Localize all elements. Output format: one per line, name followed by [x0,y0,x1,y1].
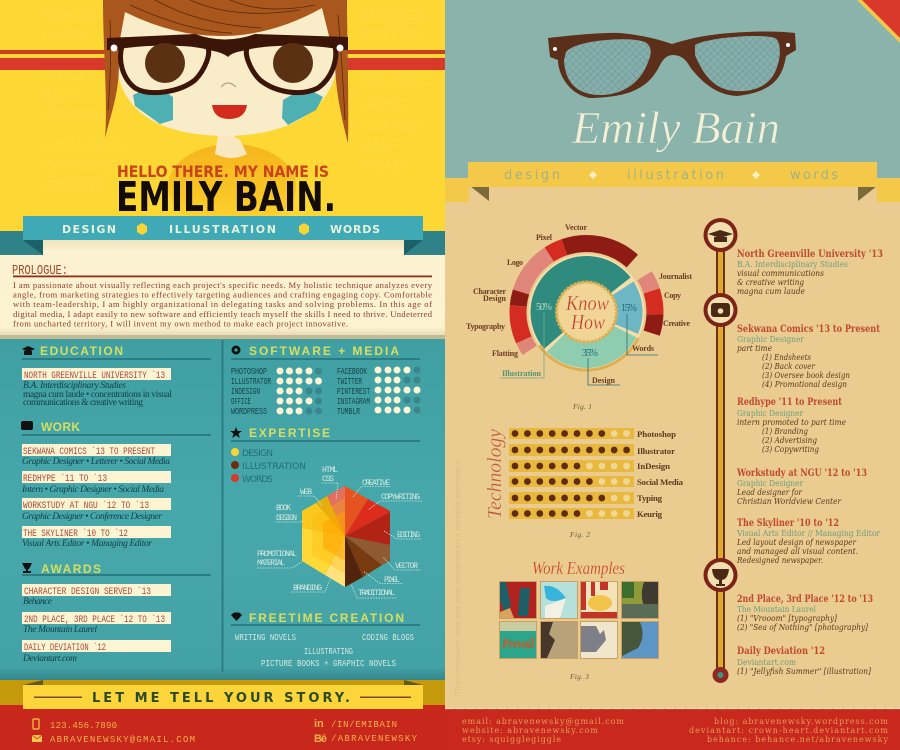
panel: left page header: STRONG [43,177,107,194]
prologue paragraph [13,280,433,328]
contact: behance: Bē [314,733,327,745]
section: software and media: ILLUSTRATOR [231,377,271,387]
entry: north greenville [737,249,883,297]
icon: end marker [712,667,728,683]
hexagon labels: VECTOR [395,562,418,571]
hexagon labels: MATERIAL [257,559,285,568]
section: software and media: PINTEREST [337,387,370,397]
entry: redhype: Redhype '11 to Present [737,397,842,408]
ribbon: right skills banner [445,162,900,202]
section: freetime creation: PICTURE BOOKS + GRAPHIC NOVELS [261,658,396,669]
character portrait [103,0,348,228]
footer contacts right: deviantart: crown-heart.deviantart.com [689,726,888,735]
section: software and media [231,344,420,417]
segment labels: Journalist [659,272,692,281]
hexagon labels: TRADITIONAL [358,589,395,598]
outer ring segments [491,217,682,407]
section: work: THE SKYLINER `10 TO `12 [23,527,128,540]
timeline spine [716,237,725,675]
hexagon labels: DESIGN [276,514,297,523]
entry: workstudy [736,468,867,507]
panel: left page header: LATTE [360,97,406,114]
panel: left page header: MOUNTAIN [360,49,439,66]
panel: left page header [0,0,446,240]
hexagon labels: PROMOTIONAL [257,550,297,559]
vertical fine print: This curriculum vitae has been designed on a reusable workspace [454,460,462,696]
entry: redhype: intern promoted to part time [737,418,846,428]
entry: sekwana comics: part time [737,344,772,354]
name headline: EMILY BAIN. [116,173,336,221]
percentage callouts: Illustration [502,369,542,378]
section: education: EDUCATION [40,344,123,358]
entry: mountain laurel: (1) "Vrooom" [typography] [737,613,838,624]
legend: WORDS [242,475,273,485]
center label [565,291,609,334]
entry: redhype: (1) Branding [762,426,808,437]
panel: left page header: ROAST [360,157,412,174]
segment labels: Vector [565,223,587,232]
segment labels [466,223,692,358]
dots [512,430,630,517]
entry: the skyliner [736,518,881,566]
section: software and media: WORDPRESS [231,407,267,417]
percentage callouts: 50% [536,302,552,313]
bar labels: Typing [637,493,663,503]
panel: right footer [445,708,900,750]
footer contacts left: website: abravenewsky.com [462,726,598,735]
section: freetime creation [231,611,420,669]
thumbnails [499,581,659,659]
contact: behance [314,733,418,745]
segment labels: Typography [466,322,505,331]
panel: left page header: BLACK [43,47,92,64]
segment labels: Design [483,294,507,303]
entry: daily deviation: Daily Deviation '12 [737,646,825,657]
footer contacts left [462,717,624,744]
segment labels: Pixel [536,233,553,242]
entry: sekwana comics: (3) Oversee book design [762,370,850,381]
ribbon: right skills banner: words [790,168,838,183]
entry: workstudy: Christian Worldview Center [737,497,842,507]
entry: daily deviation: Deviantart.com [737,658,796,668]
section: education: NORTH GREENVILLE UNIVERSITY `13 [24,369,165,382]
hexagon labels [257,466,422,598]
segment labels: Character [473,287,506,296]
rating dots [276,366,420,414]
section: software and media: PHOTOSHOP [231,367,267,377]
percentage callouts: Words [632,344,654,353]
center label: How [570,310,605,334]
panel: right page background [445,0,900,750]
panel: prologue [0,240,446,339]
segment labels: Logo [507,258,523,267]
section: awards: Behance [23,597,52,607]
bars [509,428,634,519]
corner accent [857,0,900,43]
center label: Know [565,291,609,315]
panel: left page header: SEASON [43,107,106,124]
hexagon labels: BOOK [276,504,291,513]
gallery: work examples [499,558,659,681]
icon: work badge [704,293,738,327]
icon: disc [232,346,240,354]
contact: linkedin [314,718,397,730]
entry: sekwana comics: Graphic Designer [737,335,805,345]
section: freetime creation: FREETIME CREATION [249,611,404,625]
prologue paragraph: with team-leadership, I am highly organizational in delegating tasks and solving problems. In this age of [13,299,432,309]
icon: diamond [231,612,242,621]
chart: technology rating [484,428,684,539]
section: work: Visual Arts Editor • Managing Editor [22,539,152,549]
icon: work badge [21,421,33,430]
gallery heading: Work Examples [532,558,625,578]
section: awards [22,562,211,664]
section: work: SEKWANA COMICS `13 TO PRESENT [23,445,155,458]
footer contacts right [689,717,888,744]
bar labels [637,429,684,519]
section: work: Graphic Designer • Conference Designer [22,511,162,522]
section: awards: AWARDS [41,562,101,576]
percentage callouts [500,302,658,385]
bar labels: Keurig [637,509,663,519]
legend: DESIGN [242,449,273,459]
panel: left page header: KOPI [43,87,79,104]
entry: the skyliner: The Skyliner '10 to '12 [737,518,839,529]
section: education [22,344,211,408]
entry: the skyliner: Redesigned newspaper. [736,556,823,566]
entry: workstudy: Lead designer for [736,488,803,498]
entry: redhype: (2) Advertising [762,435,817,446]
entry: daily deviation [737,646,872,677]
icon: graduation cap badge [704,218,738,252]
hexagon labels: PIXEL [384,576,400,585]
hexagon labels: HTML [322,466,338,475]
section: work: Graphic Designer • Letterer • Social Media [22,457,170,467]
section: freetime creation: WRITING NOVELS [235,632,296,643]
timeline [704,218,883,683]
section: software and media: FACEBOOK [337,367,367,377]
entry: redhype: (3) Copywriting [762,444,819,455]
figure caption: Fig. 3 [569,672,589,681]
prologue heading: PROLOGUE: [12,263,68,279]
hexagon chart [302,486,390,587]
section: education: magna cum laude • concentrations in visual [23,390,172,400]
panel: left footer [0,680,446,750]
icon: trophy badge [704,558,738,592]
bar labels: Social Media [637,477,684,487]
section: work: REDHYPE `11 TO `13 [23,472,107,485]
prologue paragraph: I am passionate about visually reflecting each project's specific needs. My holistic technique analyzes every [13,280,433,290]
contact: linkedin: in [314,718,324,730]
prologue paragraph: angle, from marketing strategies to effectively targeting audiences and crafting engaging copy. Comfortable [13,290,432,300]
entry: sekwana comics [737,324,880,390]
entry: the skyliner: Led layout design of newspaper [736,538,857,548]
section: software and media: OFFICE [231,397,251,407]
contact: email: ABRAVENEWSKY@GMAIL.COM [50,735,195,745]
section: expertise: EXPERTISE [249,426,330,440]
section: education: B.A. Interdisciplinary Studies [23,381,126,391]
panel: left page header: HALF [360,137,398,154]
section: awards: CHARACTER DESIGN SERVED `13 [24,585,151,598]
entry: mountain laurel: (2) "Sea of Nothing" [photography] [737,622,869,633]
greeting text: HELLO THERE. MY NAME IS [117,162,329,181]
section: work: WORKSTUDY AT NGU `12 TO `13 [23,499,149,512]
hexagon labels: CREATIVE [362,479,390,488]
entry: mountain laurel: The Mountain Laurel [737,605,816,615]
bar labels: InDesign [637,461,670,471]
hexagon labels: BRANDING [293,584,322,593]
entry: north greenville: B.A. Interdisciplinary Studies [737,260,848,270]
section: awards: Deviantart.com [22,654,77,664]
icon: trophy [22,563,32,573]
entry: mountain laurel [737,594,873,633]
panel: left page header: DARK [43,27,85,44]
hexagon labels: COPYWRITING [381,493,420,502]
section: expertise [230,426,422,598]
figure caption: Fig. 2 [569,530,590,539]
entry: north greenville: & creative writing [737,278,804,288]
section: awards: 2ND PLACE, 3RD PLACE `12 TO `13 [24,613,165,626]
ribbon: teal skills banner: ILLUSTRATION [169,223,276,236]
icon: brown glasses [548,32,796,98]
bar labels: Illustrator [637,446,675,456]
segment labels: Creative [663,319,690,328]
section: software and media: TWITTER [337,377,362,387]
script name: Emily Bain [571,102,780,153]
panel: left page header: COFFEE [360,117,421,134]
section: work: WORK [41,420,80,434]
section: work [21,420,211,549]
legend: ILLUSTRATION [242,462,306,472]
entry: redhype: Graphic Designer [737,409,804,419]
inner ring segments [527,252,646,372]
panel: left page header: ORIGIN [43,7,96,24]
panel: teal skills area [0,339,446,684]
percentage callouts: 15% [621,303,637,314]
entry: sekwana comics: (2) Back cover [762,361,816,372]
entry: north greenville: visual communications [737,269,825,279]
contact: behance: /ABRAVENEWSKY [331,734,418,744]
icon: star [230,427,242,438]
section: software and media: TUMBLR [337,407,360,417]
panel: left page header: SOLUBLE [360,72,429,89]
panel: left page header: SINGLE [43,67,98,84]
entry: the skyliner: Visual Arts Editor // Managing Editor [736,529,881,539]
entry: workstudy: Workstudy at NGU '12 to '13 [736,468,867,479]
chart: know how donut [466,217,692,411]
ribbon: right skills banner: illustration [627,168,724,183]
figure caption: Fig. 1 [572,402,592,411]
entry: sekwana comics: (1) Endsheets [762,352,812,363]
footer contacts left: email: abravenewsky@gmail.com [462,717,624,726]
prologue paragraph: digital media, I adapt easily to new software and efficiently teach myself the skills I need to thrive. Undeterred [13,309,433,319]
ribbon: teal skills banner [0,216,446,255]
segment labels: Flatting [492,349,518,358]
section: freetime creation: ILLUSTRATING [304,646,353,657]
section: software and media: INSTAGRAM [337,397,370,407]
panel: left page header: COFFEE [360,27,421,44]
thumbnails: Prevail [502,637,534,652]
percentage callouts: Design [592,376,616,385]
panel: left page header: CAFFEINE [43,157,117,174]
ribbon: right skills banner: design [504,168,560,183]
ribbon: teal skills banner: DESIGN [62,223,116,236]
ribbon: teal skills banner: WORDS [330,223,380,236]
entry: the skyliner: and managed all visual content. [737,547,858,557]
prologue paragraph: from uncharted territory, I will invent my own method to make each project innovative. [13,318,348,328]
entry: sekwana comics: (4) Promotional design [762,379,847,390]
entry: north greenville: magna cum laude [737,287,805,297]
percentage callouts: 35% [582,348,598,359]
segment labels: Copy [664,291,681,300]
contact: phone: 123.456.7890 [50,721,117,731]
entry: workstudy: Graphic Designer [737,479,804,489]
panel: left page header: ARABICA [360,7,426,24]
footer contacts right: behance: behance.net/abravenewsky [707,735,888,744]
entry: redhype [737,397,846,455]
legend [231,448,306,485]
footer contacts left: etsy: squigglegiggle [462,735,561,744]
banner: call to action: LET ME TELL YOUR STORY. [92,691,350,706]
icon: graduation cap [22,346,35,355]
contact: phone [33,719,117,731]
section: software and media: SOFTWARE + MEDIA [249,344,399,358]
section: work: Intern • Graphic Designer • Social Media [21,485,164,495]
hexagon labels: EDITING [397,531,420,540]
section: awards: The Mountain Laurel [23,625,97,635]
hexagon labels: CSS [322,475,334,484]
banner: call to action [23,685,423,709]
contact: linkedin: /IN/EMIBAIN [331,720,397,730]
section: awards: DAILY DEVIATION `12 [24,641,106,654]
section: education: communications & creative writing [23,398,143,408]
hexagon labels: WEB [300,488,312,497]
vertical title: Technology [484,429,506,519]
section: freetime creation: CODING BLOGS [362,632,414,643]
panel: left page header: CARAJILLO [43,137,125,154]
bar labels: Photoshop [637,429,676,439]
entry: daily deviation: (1) "Jellyfish Summer" [illustration] [737,666,872,677]
section: software and media: INDESIGN [231,387,260,397]
footer contacts right: blog: abravenewsky.wordpress.com [714,717,888,726]
stripes behind head [0,50,446,70]
